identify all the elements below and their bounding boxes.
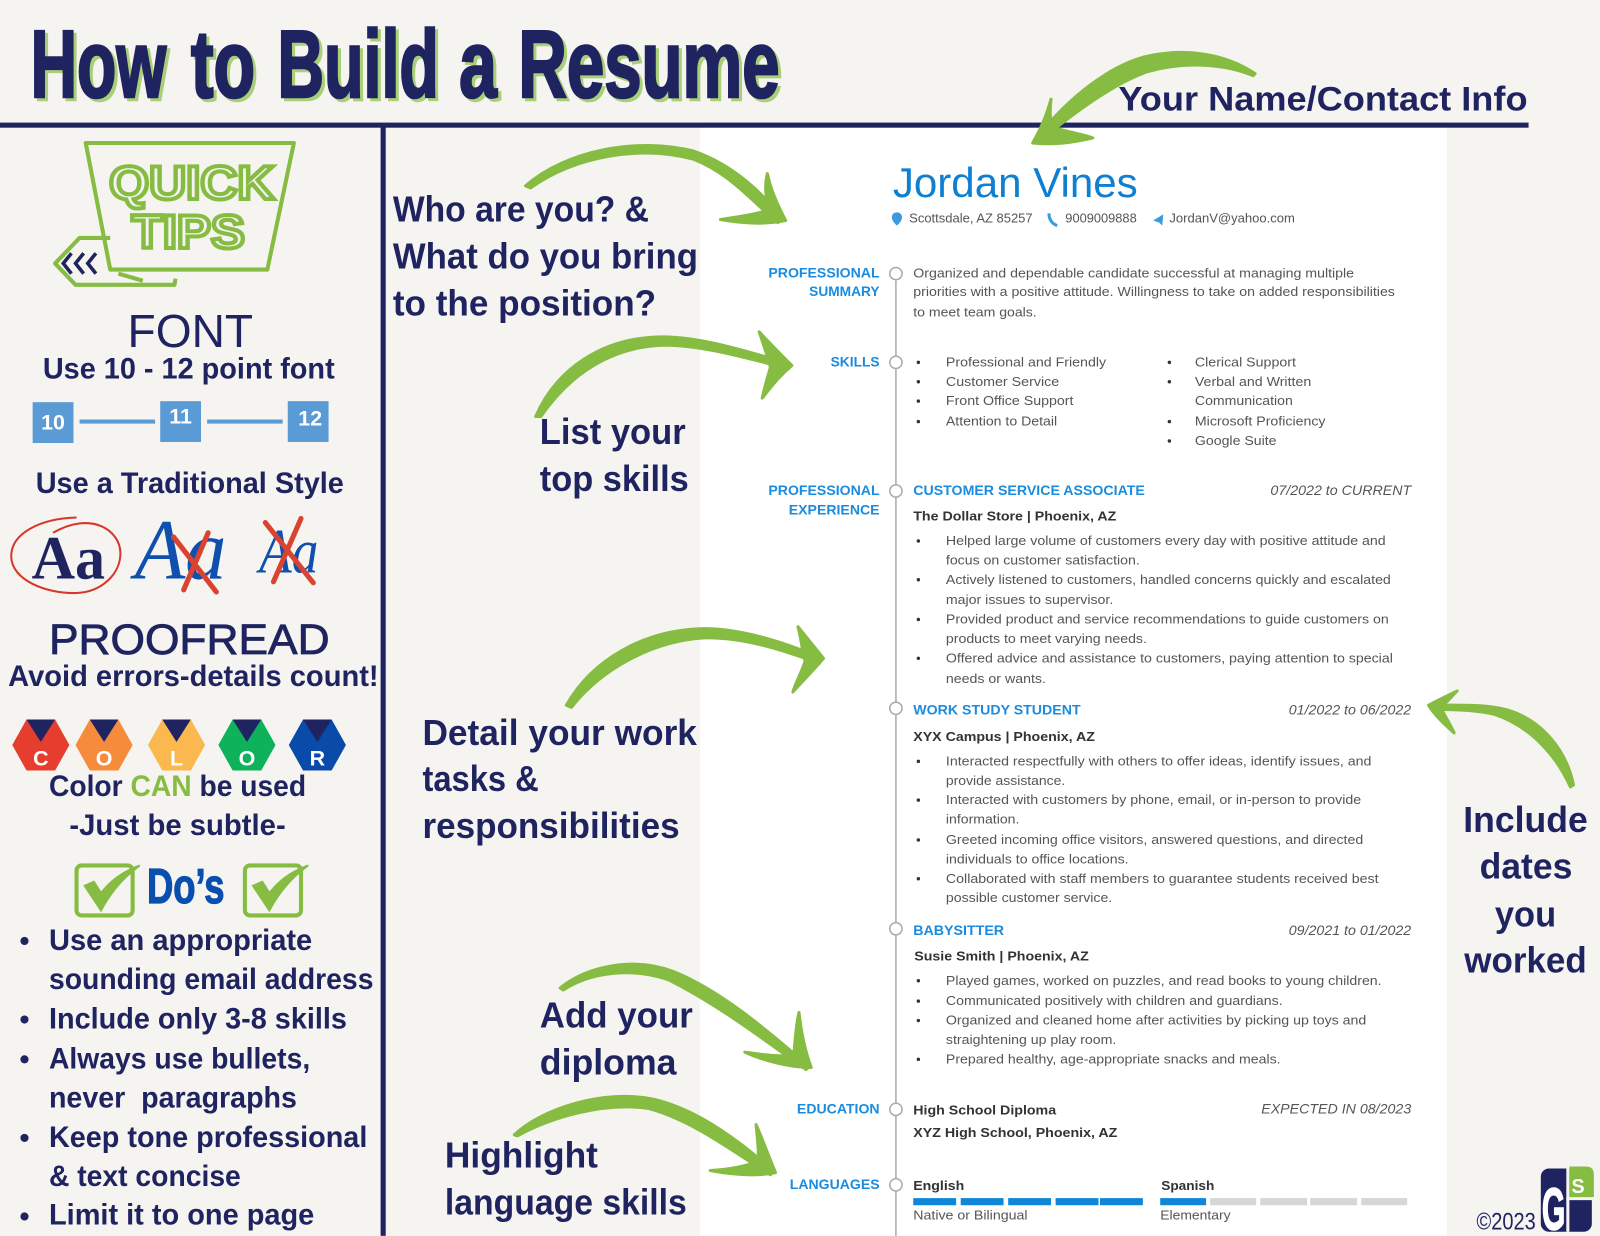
callout: who are you: What do you bring bbox=[393, 237, 698, 277]
callout: include dates: dates bbox=[1480, 847, 1572, 887]
education: XYZ High School, Phoenix, AZ bbox=[913, 1125, 1117, 1140]
quick tips badge bbox=[55, 143, 294, 285]
font size scale: 12 bbox=[298, 407, 322, 431]
summary text: to meet team goals. bbox=[913, 304, 1037, 319]
font size scale bbox=[33, 401, 329, 443]
skills list: Customer Service bbox=[946, 374, 1059, 389]
title: a bbox=[459, 11, 497, 118]
color hexagons: O bbox=[96, 746, 112, 770]
title bbox=[31, 11, 783, 121]
callout: skills: List your bbox=[540, 412, 686, 452]
callout: who are you: to the position? bbox=[393, 283, 656, 323]
font style samples: Aa bbox=[130, 503, 227, 598]
timeline bbox=[890, 267, 902, 1236]
skills list: Clerical Support bbox=[1195, 354, 1296, 369]
do's heading with check boxes: Do’s bbox=[147, 860, 224, 914]
title: Resume bbox=[521, 14, 783, 121]
skills list: Professional and Friendly bbox=[946, 354, 1107, 369]
color hexagons: R bbox=[310, 746, 326, 770]
do's list bbox=[20, 924, 373, 1232]
copyright and logo: ©2023 bbox=[1477, 1209, 1536, 1236]
title: How bbox=[31, 11, 167, 118]
job: work study student: possible customer service. bbox=[946, 890, 1112, 905]
skills list: Verbal and Written bbox=[1195, 374, 1311, 389]
summary text: priorities with a positive attitude. Willingness to take on added responsibilities bbox=[913, 284, 1395, 299]
arrow: to contact info bbox=[1033, 52, 1255, 144]
callout: diploma: Add your bbox=[540, 996, 693, 1036]
color hexagons: O bbox=[239, 746, 255, 770]
callout: language skills bbox=[445, 1135, 687, 1222]
callout: work tasks: Detail your work bbox=[422, 713, 697, 753]
job: customer service associate: needs or wants. bbox=[946, 671, 1046, 686]
skills list: Communication bbox=[1195, 393, 1293, 408]
color hexagons: C bbox=[33, 746, 49, 770]
job: work study student: Interacted respectfully with others to offer ideas, identify issues, and bbox=[946, 753, 1371, 768]
job: customer service associate: CUSTOMER SERVICE ASSOCIATE bbox=[913, 483, 1145, 498]
font size text: Use 10 - 12 point font bbox=[43, 353, 335, 386]
header rule bbox=[0, 123, 1529, 128]
color text: -Just be subtle- bbox=[69, 809, 286, 842]
arrow: to name bbox=[526, 146, 786, 223]
do's list: Keep tone professional bbox=[49, 1121, 367, 1154]
section labels: EDUCATION bbox=[797, 1101, 880, 1116]
contact row: 9009009888 bbox=[1065, 211, 1137, 226]
callout: include dates: Include bbox=[1463, 800, 1588, 840]
title: How bbox=[34, 14, 170, 121]
do's list: Always use bullets, bbox=[49, 1043, 310, 1076]
job: customer service associate: 07/2022 to CURRENT bbox=[1270, 483, 1413, 498]
do's heading with check boxes bbox=[77, 860, 308, 915]
copyright and logo: S bbox=[1571, 1176, 1585, 1198]
job: babysitter: Organized and cleaned home after activities by picking up toys and bbox=[946, 1013, 1366, 1028]
callout: diploma bbox=[540, 996, 693, 1083]
job: work study student: individuals to office locations. bbox=[946, 851, 1129, 866]
title: to bbox=[194, 14, 258, 121]
job: work study student: Interacted with customers by phone, email, or in-person to provide bbox=[946, 792, 1361, 807]
callout: work tasks: responsibilities bbox=[422, 806, 680, 846]
skills list: Attention to Detail bbox=[946, 414, 1057, 429]
callout: skills: top skills bbox=[540, 459, 689, 499]
callout: include dates: you bbox=[1495, 895, 1556, 935]
job: customer service associate: products to meet varying needs. bbox=[946, 631, 1147, 646]
job: customer service associate: major issues to supervisor. bbox=[946, 592, 1113, 607]
languages: Native or Bilingual bbox=[913, 1208, 1028, 1223]
panel: quick tips bbox=[8, 143, 379, 1232]
job: customer service associate: Provided product and service recommendations to guide customers on bbox=[946, 612, 1389, 627]
languages bbox=[913, 1178, 1407, 1223]
languages: Elementary bbox=[1160, 1208, 1231, 1223]
job: customer service associate: The Dollar Store | Phoenix, AZ bbox=[913, 509, 1116, 524]
label: your name and contact info: Your Name/Contact Info bbox=[1118, 80, 1528, 118]
arrow: to languages bbox=[514, 1096, 776, 1175]
job: work study student: 01/2022 to 06/2022 bbox=[1289, 702, 1412, 717]
callout: include dates: worked bbox=[1463, 941, 1587, 981]
job: customer service associate: Offered advice and assistance to customers, paying attention to special bbox=[946, 650, 1393, 665]
contact row bbox=[892, 211, 1295, 226]
column divider bbox=[381, 127, 386, 1236]
section labels: PROFESSIONAL bbox=[768, 266, 880, 281]
skills list: Google Suite bbox=[1195, 433, 1277, 448]
job: babysitter: straightening up play room. bbox=[946, 1032, 1116, 1047]
job: babysitter: BABYSITTER bbox=[913, 923, 1004, 938]
do's list: Limit it to one page bbox=[49, 1199, 314, 1232]
job: babysitter: Susie Smith | Phoenix, AZ bbox=[914, 948, 1089, 963]
job: customer service associate: Helped large volume of customers every day with positive attitude and bbox=[946, 533, 1386, 548]
job: work study student: provide assistance. bbox=[946, 773, 1065, 788]
do's list: Use an appropriate bbox=[49, 924, 312, 957]
color text: Color CAN be used bbox=[49, 770, 306, 803]
section labels: PROFESSIONAL bbox=[768, 483, 880, 498]
font size scale: 10 bbox=[41, 411, 65, 435]
callout: who are you bbox=[393, 190, 698, 323]
heading: font: FONT bbox=[128, 305, 253, 357]
do's list: never paragraphs bbox=[49, 1081, 297, 1114]
title: Resume bbox=[518, 11, 780, 118]
job: work study student: WORK STUDY STUDENT bbox=[913, 702, 1081, 717]
education: High School Diploma bbox=[913, 1102, 1057, 1117]
font size scale: 11 bbox=[169, 405, 192, 429]
section labels: EXPERIENCE bbox=[789, 502, 880, 517]
proofread text: Avoid errors-details count! bbox=[8, 660, 379, 693]
quick tips badge: TIPS bbox=[132, 206, 245, 258]
job: customer service associate bbox=[913, 483, 1413, 686]
contact row: JordanV@yahoo.com bbox=[1169, 211, 1295, 226]
arrow: to education bbox=[560, 964, 811, 1070]
title: Build bbox=[281, 14, 442, 121]
job: babysitter bbox=[913, 923, 1412, 1066]
do's list: & text concise bbox=[49, 1160, 241, 1193]
color hexagons bbox=[12, 720, 346, 771]
callout: work tasks bbox=[422, 713, 697, 846]
section labels bbox=[768, 266, 880, 1192]
job: work study student bbox=[913, 702, 1412, 905]
job: babysitter: 09/2021 to 01/2022 bbox=[1289, 923, 1412, 938]
resume panel bbox=[700, 127, 1447, 1236]
languages: Spanish bbox=[1161, 1178, 1214, 1193]
callout: include dates bbox=[1463, 800, 1588, 981]
resume name: Jordan Vines bbox=[893, 159, 1138, 206]
skills list: Microsoft Proficiency bbox=[1195, 414, 1326, 429]
section labels: SKILLS bbox=[831, 354, 880, 369]
callout: language skills: language skills bbox=[445, 1182, 687, 1222]
job: customer service associate: Actively listened to customers, handled concerns quickly and escalated bbox=[946, 572, 1391, 587]
job: work study student: Collaborated with staff members to guarantee students received best bbox=[946, 871, 1379, 886]
heading: proofread: PROOFREAD bbox=[49, 616, 330, 664]
job: work study student: Greeted incoming office visitors, answered questions, and directed bbox=[946, 832, 1363, 847]
title: Build bbox=[278, 11, 439, 118]
callout: work tasks: tasks & bbox=[422, 759, 539, 799]
section labels: SUMMARY bbox=[809, 284, 880, 299]
callout: skills bbox=[540, 412, 689, 499]
do's list: sounding email address bbox=[49, 963, 373, 996]
quick tips badge: QUICK bbox=[109, 157, 275, 209]
summary text bbox=[913, 266, 1395, 319]
title: a bbox=[462, 14, 500, 121]
section labels: LANGUAGES bbox=[790, 1177, 880, 1192]
do's list: Include only 3-8 skills bbox=[49, 1003, 347, 1036]
summary text: Organized and dependable candidate successful at managing multiple bbox=[913, 266, 1354, 281]
contact row: Scottsdale, AZ 85257 bbox=[909, 211, 1033, 226]
education: EXPECTED IN 08/2023 bbox=[1261, 1101, 1412, 1116]
education bbox=[913, 1101, 1412, 1140]
job: work study student: information. bbox=[946, 812, 1019, 827]
job: babysitter: Played games, worked on puzzles, and read books to young children. bbox=[946, 973, 1382, 988]
skills list: Front Office Support bbox=[946, 393, 1074, 408]
arrow: to skills bbox=[536, 332, 792, 416]
languages: English bbox=[913, 1178, 964, 1193]
skills list bbox=[917, 354, 1326, 448]
arrow: to dates bbox=[1429, 691, 1573, 787]
callout: language skills: Highlight bbox=[445, 1135, 598, 1175]
callout: diploma: diploma bbox=[540, 1043, 678, 1083]
font style samples: Aa bbox=[256, 517, 318, 587]
arrow: to experience bbox=[566, 627, 823, 707]
color hexagons: L bbox=[170, 746, 183, 770]
color text bbox=[49, 770, 306, 842]
callout: who are you: Who are you? & bbox=[393, 190, 649, 230]
job: work study student: XYX Campus | Phoenix, AZ bbox=[913, 729, 1095, 744]
job: customer service associate: focus on customer satisfaction. bbox=[946, 552, 1140, 567]
traditional style heading: Use a Traditional Style bbox=[36, 467, 344, 500]
font style samples: Aa bbox=[32, 525, 105, 593]
copyright and logo bbox=[1477, 1166, 1594, 1236]
font style samples bbox=[11, 503, 318, 598]
title: to bbox=[191, 11, 255, 118]
job: babysitter: Prepared healthy, age-appropriate snacks and meals. bbox=[946, 1051, 1281, 1066]
job: babysitter: Communicated positively with children and guardians. bbox=[946, 993, 1283, 1008]
